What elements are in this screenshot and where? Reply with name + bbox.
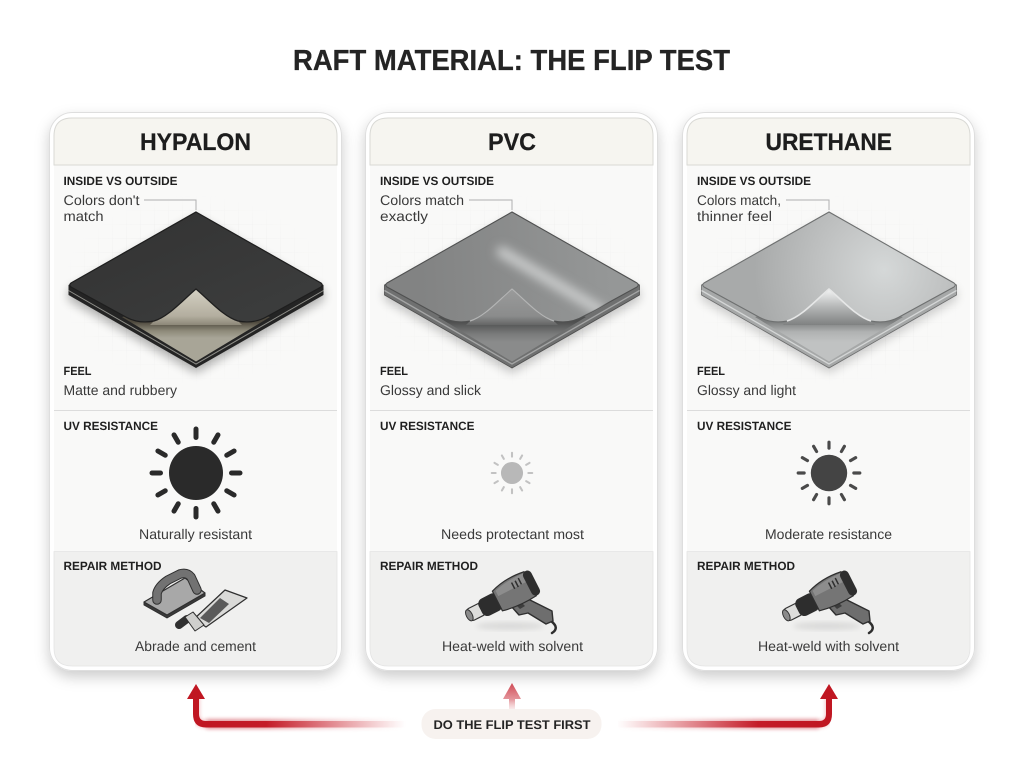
text: inside vs outside: match <box>64 208 104 224</box>
label: repair method: REPAIR METHOD <box>380 559 478 573</box>
label: repair method: REPAIR METHOD <box>697 559 795 573</box>
heading: Urethane <box>687 118 970 165</box>
text: inside vs outside <box>380 174 494 224</box>
label: UV resistance: UV RESISTANCE <box>380 419 474 433</box>
label: UV resistance: UV RESISTANCE <box>64 419 158 433</box>
label: UV resistance: UV RESISTANCE <box>697 419 792 433</box>
text: needs protectant most: Needs protectant most <box>441 526 584 542</box>
icon: heat gun <box>777 568 873 633</box>
section: repair method <box>54 552 337 666</box>
arrow: to Urethane <box>617 684 838 729</box>
text: moderate resistance: Moderate resistance <box>765 526 892 542</box>
material sample: Hypalon sheet with peeled corner <box>68 212 324 373</box>
text: feel: FEEL <box>64 364 92 378</box>
callout: do the flip test first <box>422 709 602 739</box>
material sample: Urethane sheet with peeled corner <box>702 212 956 373</box>
text: feel: Glossy and light <box>697 382 796 398</box>
text: inside vs outside: INSIDE VS OUTSIDE <box>697 174 811 188</box>
text: feel <box>697 364 796 398</box>
text: heat-weld with solvent: Heat-weld with solvent <box>758 638 899 654</box>
arrow: to PVC <box>503 683 521 709</box>
text: feel <box>64 364 177 398</box>
heading: PVC: PVC <box>488 129 536 156</box>
panel: Urethane <box>682 112 974 670</box>
text: inside vs outside <box>697 174 811 224</box>
icon: heat gun <box>460 568 556 633</box>
text: inside vs outside: INSIDE VS OUTSIDE <box>64 174 178 188</box>
text: inside vs outside: exactly <box>380 208 428 224</box>
section: repair method <box>687 552 970 666</box>
text: feel: FEEL <box>380 364 408 378</box>
icon: strong sun <box>152 429 240 517</box>
heading: Hypalon <box>54 118 337 165</box>
text: inside vs outside: Colors don't <box>64 192 140 208</box>
text: abrade and cement: Abrade and cement <box>135 638 256 654</box>
icon: faint sun <box>492 453 532 493</box>
text: heat-weld with solvent: Heat-weld with solvent <box>442 638 583 654</box>
section: repair method <box>370 552 653 666</box>
text: inside vs outside: Colors match <box>380 192 464 208</box>
text: feel: FEEL <box>697 364 725 378</box>
text: inside vs outside: thinner feel <box>697 208 772 224</box>
text: naturally resistant: Naturally resistant <box>139 526 252 542</box>
panel: PVC <box>366 112 658 670</box>
text: inside vs outside: INSIDE VS OUTSIDE <box>380 174 494 188</box>
text: feel: Matte and rubbery <box>64 382 177 398</box>
arrow: to Hypalon <box>187 684 406 729</box>
text: inside vs outside <box>64 174 178 224</box>
callout: do the flip test first: DO THE FLIP TEST FIRST <box>434 718 591 732</box>
icon: medium sun <box>798 442 860 504</box>
icon: cement tube <box>179 590 247 631</box>
text: feel <box>380 364 482 398</box>
text: inside vs outside: Colors match, <box>697 192 781 208</box>
heading: Hypalon: HYPALON <box>140 129 251 156</box>
text: feel: Glossy and slick <box>380 382 482 398</box>
label: repair method: REPAIR METHOD <box>64 559 162 573</box>
title: RAFT MATERIAL: THE FLIP TEST <box>293 45 730 77</box>
icon: abrading trowel <box>144 573 205 618</box>
material sample: PVC sheet with peeled corner <box>384 212 640 373</box>
heading: Urethane: URETHANE <box>766 129 892 156</box>
panel: Hypalon <box>50 112 342 670</box>
heading: PVC <box>370 118 653 165</box>
